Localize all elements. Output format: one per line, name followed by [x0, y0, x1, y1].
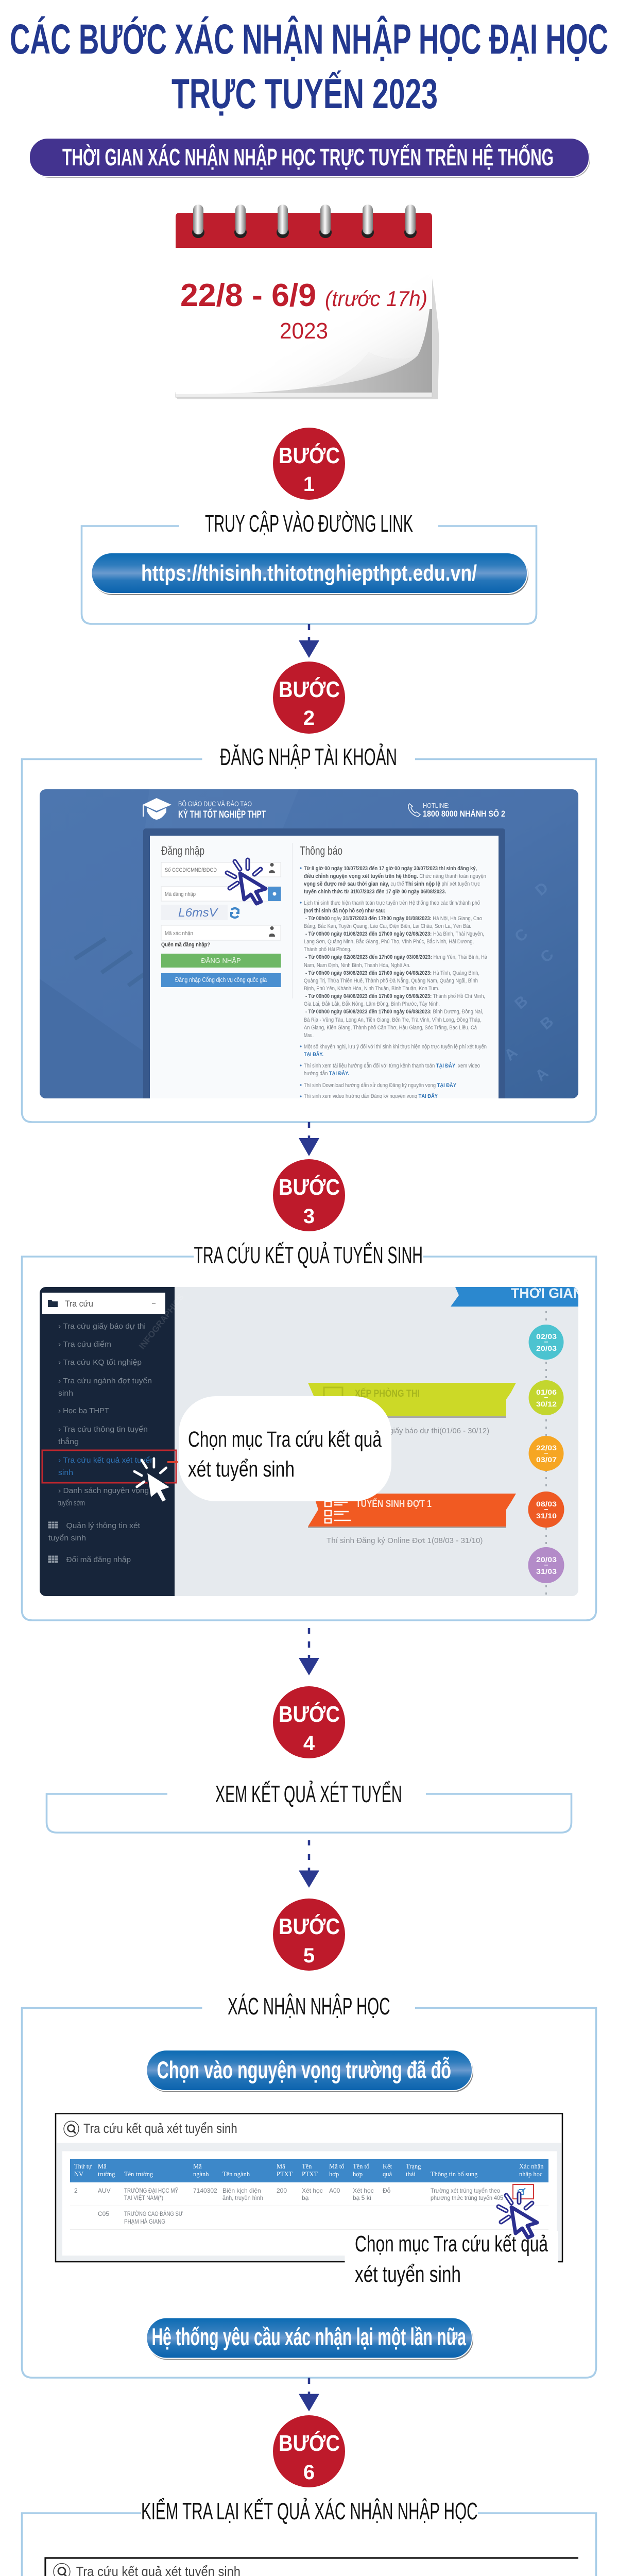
screenshot: results table: phương thức trúng tuyển 405	[431, 2194, 503, 2201]
notice text: - Từ 00h00 ngày 03/08/2023 đến 17h00 ngày 04/08/2023: Hà Tĩnh, Quảng Bình,	[305, 970, 479, 976]
screenshot: results table: TẠI VIỆT NAM(*)	[124, 2194, 163, 2201]
icon: search	[64, 2121, 79, 2137]
timeline: 03/07	[536, 1455, 557, 1464]
screenshot: login page: A	[532, 1064, 552, 1084]
arrow: step 2 to 3	[299, 1122, 319, 1156]
timeline	[528, 1311, 564, 1596]
screenshot: results table: Biên kịch điện	[222, 2187, 261, 2194]
callout: Chọn mục Tra cứu kết quả	[355, 2231, 548, 2257]
ribbon: first admission round: Thí sinh Đăng ký Online Đợt 1(08/03 - 31/10)	[327, 1536, 483, 1545]
title: TRỰC TUYẾN 2023	[171, 71, 438, 117]
screenshot: results table: Tên tổ	[353, 2163, 369, 2170]
sidebar menu: tuyển sinh	[48, 1534, 86, 1543]
ribbon: exam rooms: XẾP PHÒNG THI	[355, 1388, 420, 1399]
notice text: Thí sinh xem video hướng dẫn Đăng ký nguyện vọng TẠI ĐÂY	[304, 1093, 438, 1099]
notice text: tuyến chính thức từ 31/07/2023 đến 17 giờ 00 ngày 06/08/2023.	[304, 889, 446, 895]
notice text: Gia Lai, Đắk Lắk, Đắk Nông, Lâm Đồng, Bình Phước, Tây Ninh.	[304, 1001, 440, 1007]
sidebar menu: Đổi mã đăng nhập	[66, 1555, 131, 1564]
sidebar menu: › Tra cứu giấy báo dự thi	[58, 1322, 146, 1331]
header text: ministry	[178, 800, 266, 820]
step 1 badge: BƯỚC	[279, 443, 340, 468]
header text: ministry: BỘ GIÁO DỤC VÀ ĐÀO TẠO	[178, 800, 252, 808]
timeline: 31/03	[536, 1567, 557, 1575]
icon: click cursor	[227, 860, 266, 904]
panel: step 5	[22, 1993, 596, 2378]
notice text: Bà Rịa - Vũng Tàu, Long An, Tiền Giang, Bến Tre, Trà Vinh, Vĩnh Long, Đồng Tháp,	[304, 1017, 482, 1023]
screenshot: results table: ngành	[193, 2171, 209, 2178]
calendar year: 2023	[280, 318, 328, 344]
login form: Đăng nhập	[161, 844, 204, 857]
screenshot: results table: quả	[383, 2171, 392, 2178]
notice text: Một số khuyến nghị, lưu ý đối với thí sinh khi thực hiện nộp trực tuyến lệ phí xét tuyển	[304, 1044, 487, 1050]
screenshot: results table: AUV	[98, 2187, 111, 2194]
screenshot: results table: A00	[329, 2187, 340, 2194]
step 4 badge: BƯỚC	[279, 1701, 340, 1727]
notice text: (nơi thí sinh đã nộp hồ sơ) như sau:	[304, 908, 385, 914]
screenshot: results table: PHẠM HÀ GIANG	[124, 2217, 165, 2225]
screenshot: results table: hợp	[329, 2171, 339, 2178]
notice text: điều chỉnh nguyện vọng xét tuyển trên hệ thống. Chức năng thanh toán nguyện	[304, 873, 486, 879]
screenshot: login page: B	[511, 992, 531, 1012]
notice text: - Từ 00h00 ngày 02/08/2023 đến 17h00 ngày 03/08/2023: Hưng Yên, Thái Bình, Hà	[305, 954, 488, 960]
notice text: - Từ 00h00 ngày 04/08/2023 đến 17h00 ngày 05/08/2023: Thành phố Hồ Chí Minh,	[305, 993, 485, 999]
screenshot: results table: Mã	[193, 2163, 202, 2170]
notice text: Quảng Trị, Thừa Thiên Huế, Thành phố Đà Nẵng, Quảng Nam, Quảng Ngãi, Bình	[304, 977, 478, 984]
step 5 badge	[273, 1899, 345, 1971]
link pill: https://thisinh.thitotnghiepthpt.edu.vn/	[141, 561, 477, 586]
pill: choose passed wish	[146, 2050, 473, 2092]
heading: step 3: TRA CỨU KẾT QUẢ TUYỂN SINH	[194, 1242, 423, 1268]
timeline: 30/12	[536, 1400, 557, 1408]
step 5 badge: 5	[303, 1944, 315, 1967]
notice text: Bằng, Bắc Kạn, Tuyên Quang, Lào Cai, Điện Biên, Lai Châu, Sơn La, Yên Bái.	[304, 923, 471, 929]
login form: Số CCCD/CMND/ĐDCD	[165, 867, 217, 873]
callout: xét tuyển sinh	[355, 2262, 461, 2287]
calendar	[176, 205, 439, 399]
screenshot: results table: Trạng	[406, 2163, 421, 2170]
panel: step 3	[22, 1242, 596, 1620]
screenshot: results table: Đỗ	[383, 2187, 391, 2194]
screenshot: results table: TRƯỜNG CAO ĐẲNG SƯ	[124, 2210, 183, 2217]
screenshot: results table: 2	[74, 2187, 78, 2194]
screenshot: lookup menu	[40, 1285, 583, 1596]
screenshot: results table: NV	[74, 2171, 83, 2178]
screenshot: results table: Thứ tự	[74, 2163, 92, 2170]
sidebar menu: › Tra cứu KQ tốt nghiệp	[58, 1358, 142, 1367]
ribbon: first admission round: TUYỂN SINH ĐỢT 1	[356, 1498, 432, 1510]
timeline: 22/03	[536, 1444, 557, 1452]
screenshot: results table: Tên trường	[124, 2171, 153, 2178]
login form: ĐĂNG NHẬP	[201, 957, 241, 964]
notice text: An Giang, Kiên Giang, Thành phố Cần Thơ, Hậu Giang, Sóc Trăng, Bạc Liêu, Cà	[304, 1025, 477, 1031]
screenshot: results table: nhập học	[519, 2171, 543, 2178]
icon: white click cursor	[134, 1459, 171, 1502]
sidebar menu: Quản lý thông tin xét	[66, 1521, 141, 1530]
icon: click cursor	[499, 2194, 537, 2238]
screenshot: results table	[56, 2113, 562, 2262]
sidebar menu: › Tra cứu ngành đợt tuyển	[58, 1377, 152, 1385]
notice text: - Từ 00h00 ngày 31/07/2023 đến 17h00 ngày 01/08/2023: Hà Nội, Hà Giang, Cao	[305, 916, 482, 922]
step 6 badge: 6	[303, 2461, 315, 2484]
highlight: confirm icon	[513, 2184, 534, 2199]
step 2 badge: 2	[303, 707, 315, 730]
screenshot: results table: C05	[98, 2210, 109, 2217]
login form: Đăng nhập Cổng dịch vụ công quốc gia	[175, 976, 267, 984]
screenshot: results table: Xét học	[353, 2187, 374, 2194]
arrow: step 1 to 2	[299, 624, 319, 658]
screenshot: results table: trường	[98, 2171, 115, 2178]
screenshot: results table: Xác nhận	[519, 2163, 544, 2170]
login form: Mã xác nhận	[165, 930, 193, 937]
notice text: Thí sinh xem tài liệu hướng dẫn đối với từng kênh thanh toán TẠI ĐÂY, xem video	[304, 1062, 480, 1069]
step 6 badge	[273, 2415, 345, 2487]
icon: graduation cap logo	[143, 798, 171, 820]
step 3 badge	[273, 1159, 345, 1231]
screenshot: results table: Mã tổ	[329, 2163, 345, 2170]
notice text: Thí sinh Download hướng dẫn sử dụng Đăng ký nguyện vọng TẠI ĐÂY	[304, 1082, 457, 1089]
login form: L6msV	[178, 906, 219, 919]
screenshot: results table: bạ	[302, 2194, 309, 2201]
sidebar menu: › Tra cứu kết quả xét tuyển	[58, 1456, 154, 1465]
heading: step 1: TRUY CẬP VÀO ĐƯỜNG LINK	[205, 510, 413, 537]
screenshot: results table: Tra cứu kết quả xét tuyển sinh	[83, 2121, 237, 2136]
notice text: Thành phố Hải Phòng.	[304, 946, 351, 953]
notice text: Mau.	[304, 1032, 314, 1039]
hotline: 1800 8000 NHÁNH SỐ 2	[423, 808, 505, 819]
step 3 badge: BƯỚC	[279, 1174, 340, 1200]
sidebar menu: › Học bạ THPT	[58, 1406, 109, 1415]
link pill	[92, 553, 528, 595]
screenshot: results table: bạ 5 kì	[353, 2194, 371, 2201]
timeline: 02/03	[536, 1332, 557, 1341]
panel: step 6	[22, 2498, 596, 2576]
notice text	[300, 844, 488, 1099]
step 6 badge: BƯỚC	[279, 2430, 340, 2456]
panel: step 2	[22, 743, 596, 1122]
timeline banner: THỜI GIAN	[511, 1285, 583, 1301]
login form	[161, 844, 281, 987]
sidebar menu: › Tra cứu điểm	[58, 1340, 111, 1349]
calendar rings	[192, 205, 417, 238]
screenshot: confirmed result	[45, 2558, 578, 2576]
screenshot: results table: Tên	[302, 2163, 312, 2170]
screenshot: results table: Trường xét trúng tuyển theo	[431, 2187, 500, 2194]
screenshot: results table: Tên ngành	[222, 2171, 250, 2178]
callout	[179, 1396, 391, 1501]
sidebar menu: INFOGRAPHICS	[137, 1292, 186, 1351]
sidebar menu: › Tra cứu thông tin tuyển	[58, 1425, 148, 1434]
panel: step 4	[46, 1781, 572, 1833]
title	[10, 16, 608, 117]
notice text: Từ 8 giờ 00 ngày 10/07/2023 đến 17 giờ 00 ngày 30/07/2023 thí sinh đăng ký,	[304, 866, 477, 872]
step 4 badge: 4	[303, 1732, 315, 1755]
notice text: Nam, Nam Định, Ninh Bình, Thanh Hóa, Nghệ An.	[304, 962, 410, 969]
screenshot: results table: PTXT	[277, 2171, 293, 2178]
heading: step 4: XEM KẾT QUẢ XÉT TUYỂN	[215, 1781, 402, 1807]
step 2 badge	[273, 662, 345, 734]
screenshot: results table: Mã	[98, 2163, 107, 2170]
callout: Chọn mục Tra cứu kết quả	[188, 1427, 382, 1452]
screenshot: login page: D	[532, 879, 552, 899]
screenshot: login page: A	[501, 1044, 521, 1064]
login form: Quên mã đăng nhập?	[161, 942, 210, 948]
sidebar menu: sinh	[58, 1468, 73, 1477]
notice text: - Từ 00h00 ngày 01/08/2023 đến 17h00 ngày 02/08/2023: Hòa Bình, Thái Nguyên,	[305, 931, 484, 937]
sidebar menu: › Danh sách nguyện vọng xét	[58, 1486, 162, 1495]
screenshot: results table: hợp	[353, 2171, 363, 2178]
highlight box	[42, 1450, 176, 1483]
pill: system asks to confirm again	[146, 2317, 473, 2360]
heading: step 2: ĐĂNG NHẬP TÀI KHOẢN	[220, 743, 397, 770]
notice text: Lạng Sơn, Quảng Ninh, Bắc Giang, Phú Thọ, Vĩnh Phúc, Bắc Ninh, Hải Dương,	[304, 938, 474, 945]
ribbon: exam rooms	[308, 1383, 516, 1435]
calendar header	[176, 213, 432, 248]
notice text: - Từ 00h00 ngày 05/08/2023 đến 17h00 ngày 06/08/2023: Bình Dương, Đồng Nai,	[305, 1009, 483, 1015]
header text: ministry: KỲ THI TỐT NGHIỆP THPT	[178, 809, 266, 820]
step 4 badge	[273, 1686, 345, 1758]
screenshot: results table: Xét học	[302, 2187, 323, 2194]
step 5 badge: BƯỚC	[279, 1913, 340, 1939]
sidebar menu: sinh	[58, 1389, 73, 1398]
screenshot: login page: C	[511, 925, 531, 945]
arrow: step 3 to 4	[299, 1628, 319, 1675]
screenshot: results table: 7140302	[193, 2187, 217, 2194]
hotline	[423, 803, 505, 817]
notice text: Định, Phú Yên, Khánh Hòa, Ninh Thuận, Bình Thuận, Kon Tum.	[304, 986, 439, 992]
screenshot: login page: C	[537, 946, 557, 966]
screenshot: results table: ảnh, truyền hình	[222, 2194, 263, 2201]
screenshot: results table: TRƯỜNG ĐẠI HỌC MỸ	[124, 2187, 178, 2194]
notice text: vọng sẽ được mở sau thời gian này, cụ thể Thí sinh nộp lệ phí xét tuyển trực	[304, 881, 480, 887]
screenshot: login page	[40, 789, 578, 1101]
login form: Mã đăng nhập	[165, 891, 196, 897]
timeline: 01/06	[536, 1388, 557, 1396]
sidebar menu	[40, 1287, 186, 1596]
timeline banner	[451, 1287, 578, 1307]
step 1 badge: 1	[303, 473, 315, 496]
sidebar menu: thẳng	[58, 1437, 79, 1446]
notice text: Lịch thi sinh thực hiện thanh toán trực tuyến trên Hệ thống theo các tỉnh/thành phố	[304, 900, 480, 906]
subtitle pill	[29, 138, 590, 178]
screenshot: results table: PTXT	[302, 2171, 318, 2178]
timeline: 20/03	[536, 1555, 557, 1564]
icon: phone	[408, 804, 420, 817]
timeline: 08/03	[536, 1500, 557, 1508]
step 3 badge: 3	[303, 1205, 315, 1228]
heading: step 5: XÁC NHẬN NHẬP HỌC	[228, 1993, 390, 2020]
timeline: 31/10	[536, 1512, 557, 1520]
calendar deadline note: (trước 17h)	[325, 286, 427, 311]
hotline: HOTLINE:	[423, 802, 450, 809]
screenshot: results table: Mã	[277, 2163, 285, 2170]
calendar dates: 22/8 - 6/9	[180, 278, 316, 313]
screenshot: results table: thái	[406, 2171, 416, 2178]
screenshot: results table: Kết	[383, 2163, 392, 2170]
callout: xét tuyển sinh	[188, 1457, 295, 1482]
timeline: 20/03	[536, 1344, 557, 1352]
notice text: TẠI ĐÂY.	[304, 1051, 323, 1058]
arrow: step 4 to 5	[299, 1840, 319, 1888]
callout	[345, 2231, 558, 2289]
sidebar menu: tuyển sớm	[58, 1499, 85, 1507]
ribbon: first admission round	[308, 1494, 516, 1545]
step 2 badge: BƯỚC	[279, 676, 340, 702]
pill: choose passed wish: Chọn vào nguyện vọng trường đã đỗ	[157, 2056, 451, 2083]
screenshot: login page: B	[537, 1013, 557, 1033]
screenshot: results table: Thông tin bổ sung	[431, 2171, 478, 2178]
arrow: step 5 to 6	[299, 2378, 319, 2411]
notice text: hướng dẫn TẠI ĐÂY.	[304, 1070, 349, 1077]
screenshot: results table: 200	[277, 2187, 287, 2194]
icon: search	[54, 2564, 70, 2576]
step 1 badge	[273, 428, 345, 500]
ribbon: exam rooms: Tra cứu giấy báo dự thi(01/06 - 30/12)	[360, 1427, 489, 1435]
sidebar menu: Tra cứu	[65, 1299, 93, 1309]
panel: step 1	[81, 510, 537, 624]
notice text: Thông báo	[300, 844, 342, 857]
